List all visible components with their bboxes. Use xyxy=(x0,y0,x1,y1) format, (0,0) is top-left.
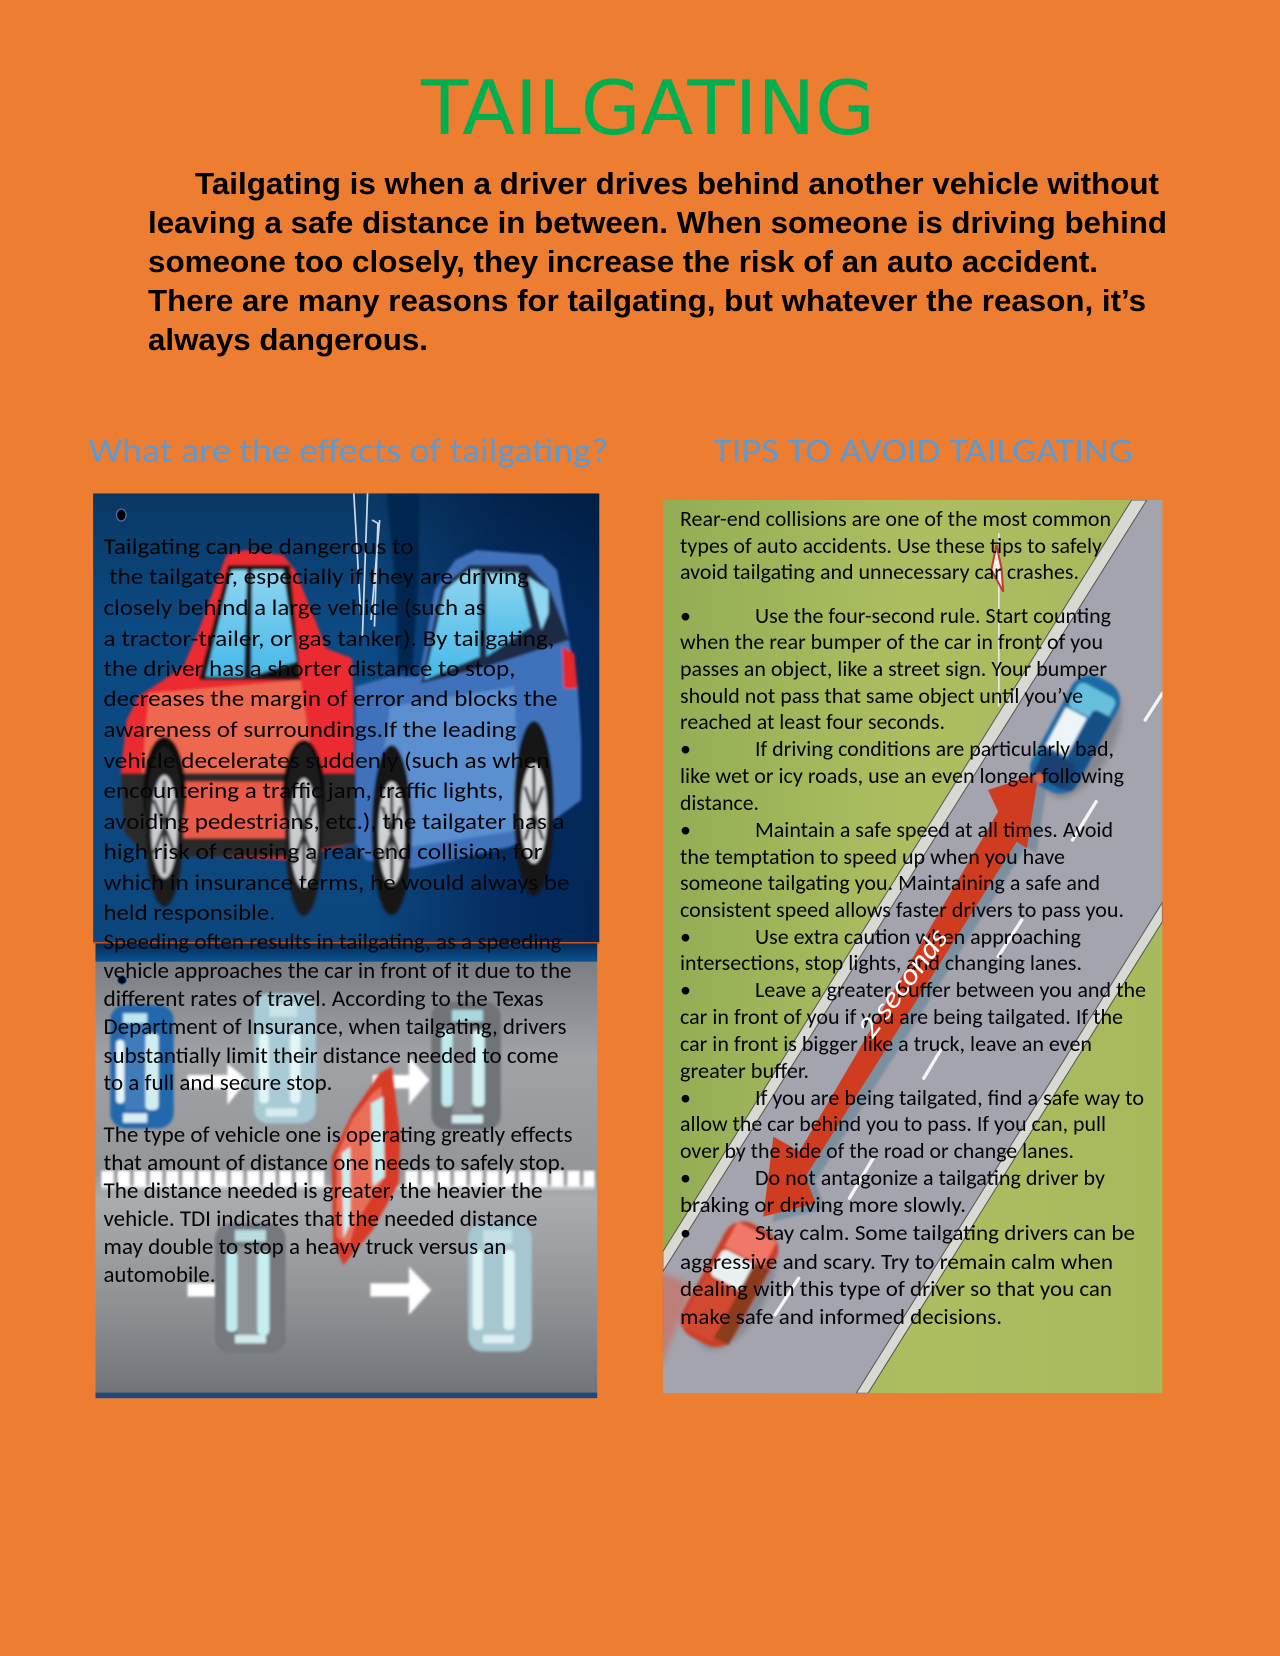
tip: bad conditions: • xyxy=(680,735,691,762)
tip: four-second rule: when the rear bumper of the car in front of you xyxy=(680,628,1103,655)
tip: bad conditions xyxy=(680,735,1124,816)
tip: four-second rule: passes an object, like a street sign. Your bumper xyxy=(680,655,1107,682)
text block: effects of tailgating, second paragraph xyxy=(104,928,572,1097)
tip: four-second rule: Use the four-second rule. Start counting xyxy=(755,602,1111,629)
text block: effects of tailgating, first paragraph: vehicle decelerates suddenly (such as when xyxy=(104,747,550,775)
grey car top right xyxy=(431,1002,501,1130)
pale car xyxy=(254,993,316,1123)
tip: safe speed: someone tailgating you. Maintaining a safe and xyxy=(680,869,1100,896)
lane divider xyxy=(101,1171,595,1190)
blue car xyxy=(356,550,581,915)
tip: bad conditions: If driving conditions are particularly bad, xyxy=(755,735,1114,762)
text block: effects of tailgating, second paragraph: different rates of travel. According to the Texas xyxy=(104,985,544,1013)
blue car xyxy=(110,1005,174,1128)
tip: let the tailgater pass: allow the car behind you to pass. If you can, pull xyxy=(680,1110,1106,1137)
intro paragraph: leaving a safe distance in between. When someone is driving behind xyxy=(148,206,1167,240)
red car xyxy=(662,1220,780,1368)
tip: let the tailgater pass: over by the side of the road or change lanes. xyxy=(680,1137,1074,1164)
tip: do not antagonize: braking or driving more slowly. xyxy=(680,1191,966,1218)
intro paragraph xyxy=(148,167,1167,357)
bullet marker xyxy=(117,509,126,521)
text block: effects of tailgating, first paragraph: Tailgating can be dangerous to xyxy=(104,533,414,561)
intro paragraph: Tailgating is when a driver drives behind another vehicle without xyxy=(195,167,1159,201)
tip: stay calm: • xyxy=(680,1219,691,1246)
tip: stay calm: dealing with this type of driver so that you can xyxy=(680,1275,1112,1302)
tip: bad conditions: distance. xyxy=(680,789,759,816)
tip: extra caution xyxy=(680,923,1082,976)
text block: tips introduction xyxy=(680,505,1111,585)
tip: let the tailgater pass xyxy=(680,1084,1144,1164)
text block: effects of tailgating, first paragraph: the driver has a shorter distance to stop, xyxy=(104,655,516,683)
tip: stay calm xyxy=(680,1219,1135,1330)
tip: stay calm: make safe and informed decisions. xyxy=(680,1303,1002,1330)
tip: do not antagonize xyxy=(680,1164,1105,1218)
title: TAILGATING xyxy=(420,64,875,152)
road surface xyxy=(663,500,1162,1393)
panel: upper effects illustration, two cars xyxy=(93,493,599,943)
panel: tips illustration, road with two-second arrow xyxy=(615,500,1162,1403)
tip: greater buffer: Leave a greater buffer between you and the xyxy=(755,976,1146,1003)
intro paragraph: someone too closely, they increase the risk of an auto accident. xyxy=(148,245,1098,279)
panel: lower effects illustration, road with cars xyxy=(95,943,597,1398)
tip: greater buffer: • xyxy=(680,976,691,1003)
tip: safe speed: Maintain a safe speed at all times. Avoid xyxy=(755,816,1113,843)
text block: effects of tailgating, first paragraph xyxy=(104,533,570,927)
heading: tips: TIPS TO AVOID TAILGATING xyxy=(713,431,1133,472)
tip: let the tailgater pass: If you are being tailgated, find a safe way to xyxy=(755,1084,1144,1111)
tip: extra caution: Use extra caution when approaching xyxy=(755,923,1081,950)
intro paragraph: There are many reasons for tailgating, but whatever the reason, it’s xyxy=(148,284,1146,318)
tip: let the tailgater pass: • xyxy=(680,1084,691,1111)
heading: effects: What are the effects of tailgating? xyxy=(88,431,608,472)
tip: do not antagonize: Do not antagonize a tailgating driver by xyxy=(755,1164,1105,1191)
tip: stay calm: Stay calm. Some tailgating drivers can be xyxy=(755,1219,1135,1246)
text block: effects of tailgating, first paragraph: which in insurance terms, he would always be xyxy=(104,869,570,897)
text block: effects of tailgating, third paragraph: that amount of distance one needs to safely stop. xyxy=(104,1149,566,1177)
tip: four-second rule: reached at least four seconds. xyxy=(680,708,945,735)
text block: tips introduction: types of auto accidents. Use these tips to safely xyxy=(680,532,1102,559)
lane dashes xyxy=(775,693,1162,1315)
text block: effects of tailgating, first paragraph: avoiding pedestrians, etc.), the tailgater has a xyxy=(104,808,564,836)
tip: do not antagonize: • xyxy=(680,1164,691,1191)
tip: safe speed xyxy=(680,816,1124,923)
text block: effects of tailgating, first paragraph: held responsible. xyxy=(104,899,276,927)
text block: effects of tailgating, third paragraph xyxy=(104,1121,572,1289)
text block: effects of tailgating, second paragraph: to a full and secure stop. xyxy=(104,1069,332,1097)
tip: extra caution: intersections, stop lights, and changing lanes. xyxy=(680,949,1082,976)
text block: effects of tailgating, first paragraph: a tractor-trailer, or gas tanker). By tailgating, xyxy=(104,625,554,653)
text block: effects of tailgating, first paragraph: awareness of surroundings.If the leading xyxy=(104,716,517,744)
arrow label: 2 seconds xyxy=(850,921,956,1045)
text block: effects of tailgating, second paragraph: vehicle approaches the car in front of it due to the xyxy=(104,957,572,985)
blue car xyxy=(1028,674,1124,800)
text block: effects of tailgating, first paragraph: the tailgater, especially if they are driving xyxy=(109,563,529,591)
red swerving car xyxy=(331,1067,400,1265)
bullet marker xyxy=(118,976,126,984)
tip: bad conditions: like wet or icy roads, use an even longer following xyxy=(680,762,1124,789)
text block: tips introduction: Rear-end collisions are one of the most common xyxy=(680,505,1111,532)
tip: four-second rule xyxy=(680,602,1111,735)
tip: stay calm: aggressive and scary. Try to remain calm when xyxy=(680,1248,1113,1275)
text block: effects of tailgating, third paragraph: The distance needed is greater, the heavier the xyxy=(104,1177,542,1205)
text block: effects of tailgating, third paragraph: automobile. xyxy=(104,1261,216,1289)
red car xyxy=(121,550,356,916)
text block: effects of tailgating, first paragraph: decreases the margin of error and blocks the xyxy=(104,685,558,713)
text block: effects of tailgating, third paragraph: The type of vehicle one is operating greatly effects xyxy=(104,1121,572,1149)
tip: four-second rule: • xyxy=(680,602,691,629)
tip: four-second rule: should not pass that same object until you’ve xyxy=(680,682,1083,709)
grey car bottom xyxy=(215,1223,286,1353)
text block: effects of tailgating, first paragraph: encountering a traffic jam, traffic lights, xyxy=(104,777,504,805)
tip: safe speed: consistent speed allows faster drivers to pass you. xyxy=(680,896,1124,923)
pale car bottom xyxy=(468,1223,532,1352)
tip: safe speed: the temptation to speed up when you have xyxy=(680,843,1065,870)
tip: greater buffer xyxy=(680,976,1146,1084)
tip: safe speed: • xyxy=(680,816,691,843)
dark pole and reflections xyxy=(354,493,419,670)
tip: greater buffer: car in front of you if you are being tailgated. If the xyxy=(680,1003,1123,1030)
text block: effects of tailgating, second paragraph: Speeding often results in tailgating, as a speeding xyxy=(104,928,562,956)
tip: greater buffer: greater buffer. xyxy=(680,1057,809,1084)
panel divider line xyxy=(93,942,599,944)
text block: effects of tailgating, first paragraph: closely behind a large vehicle (such as xyxy=(104,594,486,622)
text block: effects of tailgating, third paragraph: vehicle. TDI indicates that the needed distance xyxy=(104,1205,538,1233)
text block: tips introduction: avoid tailgating and unnecessary car crashes. xyxy=(680,558,1079,585)
road sign xyxy=(991,533,1003,707)
text block: effects of tailgating, second paragraph: substantially limit their distance needed to come xyxy=(104,1042,558,1070)
arrows xyxy=(187,1057,431,1315)
text block: effects of tailgating, first paragraph: high risk of causing a rear-end collision, for xyxy=(104,838,542,866)
two-second arrow xyxy=(763,773,1048,1222)
road kerbs xyxy=(663,500,1162,1393)
text block: effects of tailgating, third paragraph: may double to stop a heavy truck versus an xyxy=(104,1233,506,1261)
tip: greater buffer: car in front is bigger like a truck, leave an even xyxy=(680,1030,1092,1057)
intro paragraph: always dangerous. xyxy=(148,323,428,357)
text block: effects of tailgating, second paragraph: Department of Insurance, when tailgating, drivers xyxy=(104,1013,566,1041)
tip: extra caution: • xyxy=(680,923,691,950)
